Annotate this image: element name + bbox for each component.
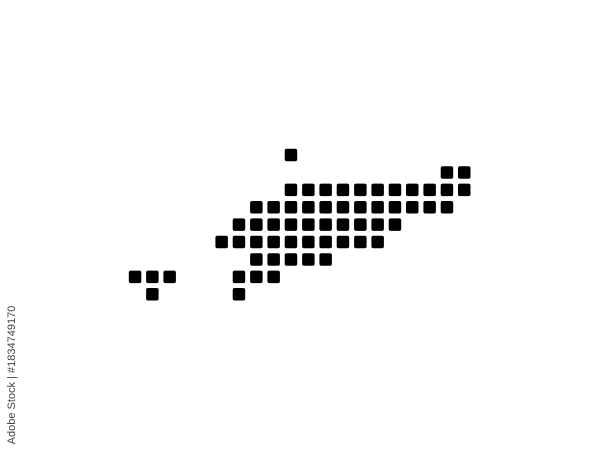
- row 0: [285, 149, 297, 161]
- vertical caption: Adobe Stock | #1834749170: [6, 306, 18, 444]
- row 8: [146, 288, 245, 300]
- row 2: [285, 184, 470, 196]
- row 7: [129, 271, 280, 283]
- row 6: [250, 253, 332, 266]
- row 3: [250, 201, 453, 214]
- row 1: [441, 166, 470, 179]
- row 5: [215, 236, 384, 248]
- row 4: [233, 218, 401, 231]
